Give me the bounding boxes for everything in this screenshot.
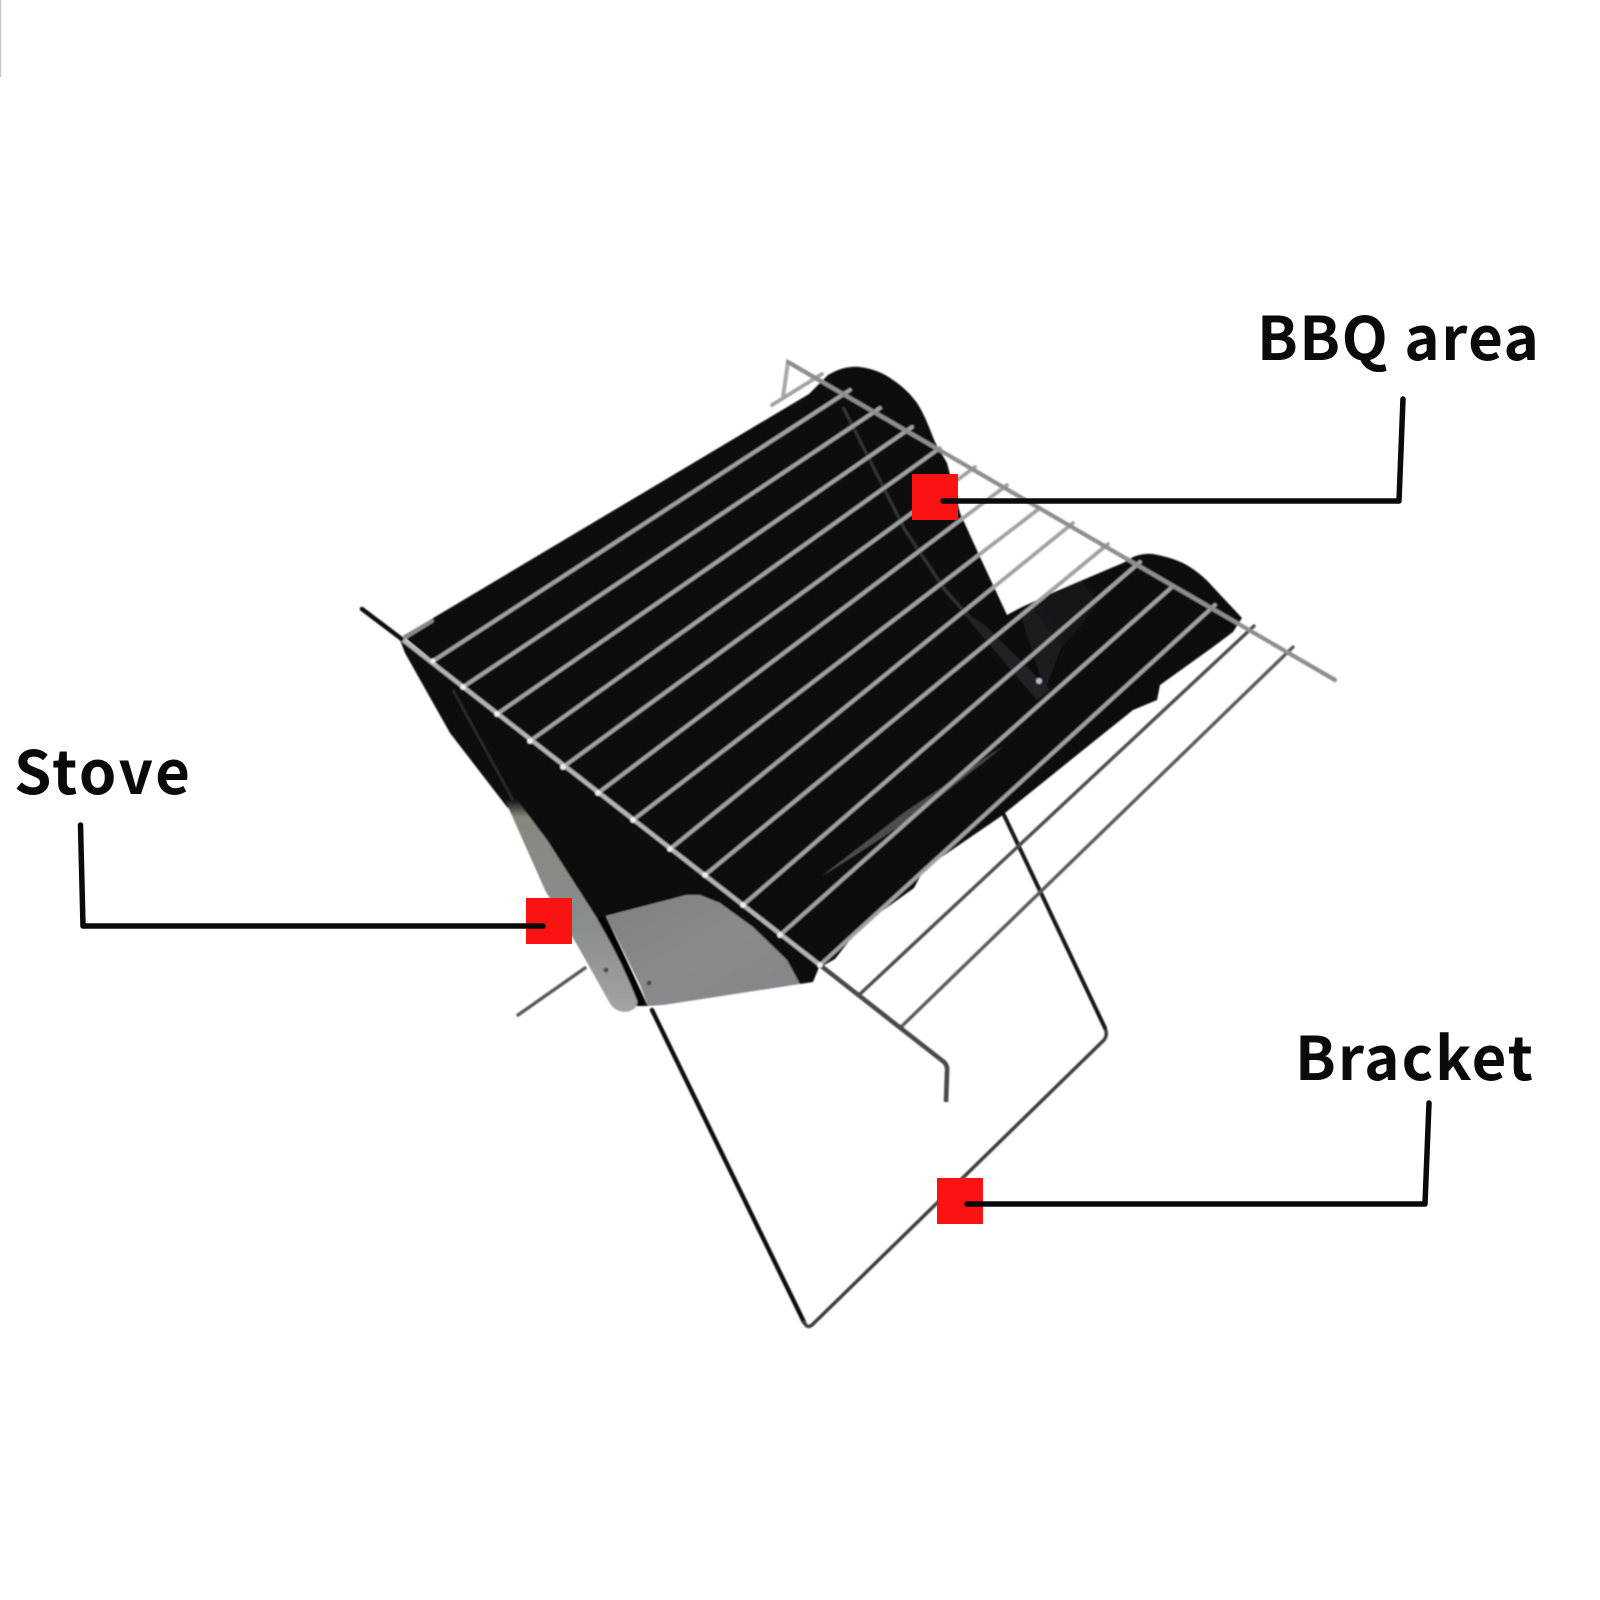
leader line: Bracket xyxy=(967,1103,1429,1204)
marker: Stove xyxy=(526,898,572,944)
back rod hook xyxy=(783,362,825,397)
leader line: BBQ area xyxy=(943,399,1403,501)
left support stub xyxy=(518,968,585,1015)
pan fold line xyxy=(843,407,1037,693)
front rod end and hook xyxy=(820,965,947,1102)
illustration: folding grill xyxy=(362,362,1335,1326)
front rod tip xyxy=(362,609,403,640)
label: Bracket: Bracket xyxy=(1295,1011,1533,1098)
label: Stove: Stove xyxy=(14,725,190,812)
leader line: Stove xyxy=(80,825,543,926)
marker: Bracket xyxy=(937,1178,983,1224)
panel inner line xyxy=(453,690,513,800)
stove side outer grey strip xyxy=(505,800,639,1012)
front rod xyxy=(403,640,820,965)
back rod xyxy=(788,362,1335,680)
panel rivets xyxy=(604,968,652,986)
bracket legs xyxy=(652,815,1106,1326)
grate bars xyxy=(406,374,1293,1026)
pan light streak xyxy=(822,745,1005,876)
rod joints xyxy=(430,658,823,968)
stove side black panel xyxy=(400,640,820,1006)
stove body: main pan xyxy=(403,367,1242,968)
pan bolt xyxy=(1036,678,1042,684)
label: BBQ area: BBQ area xyxy=(1257,291,1539,378)
stove side grey panel xyxy=(606,895,800,1006)
panel curved black edge xyxy=(600,918,642,1005)
pan fold strip xyxy=(960,610,1050,700)
marker: BBQ area xyxy=(912,474,958,520)
pan inner highlight: second hump xyxy=(1020,563,1123,690)
